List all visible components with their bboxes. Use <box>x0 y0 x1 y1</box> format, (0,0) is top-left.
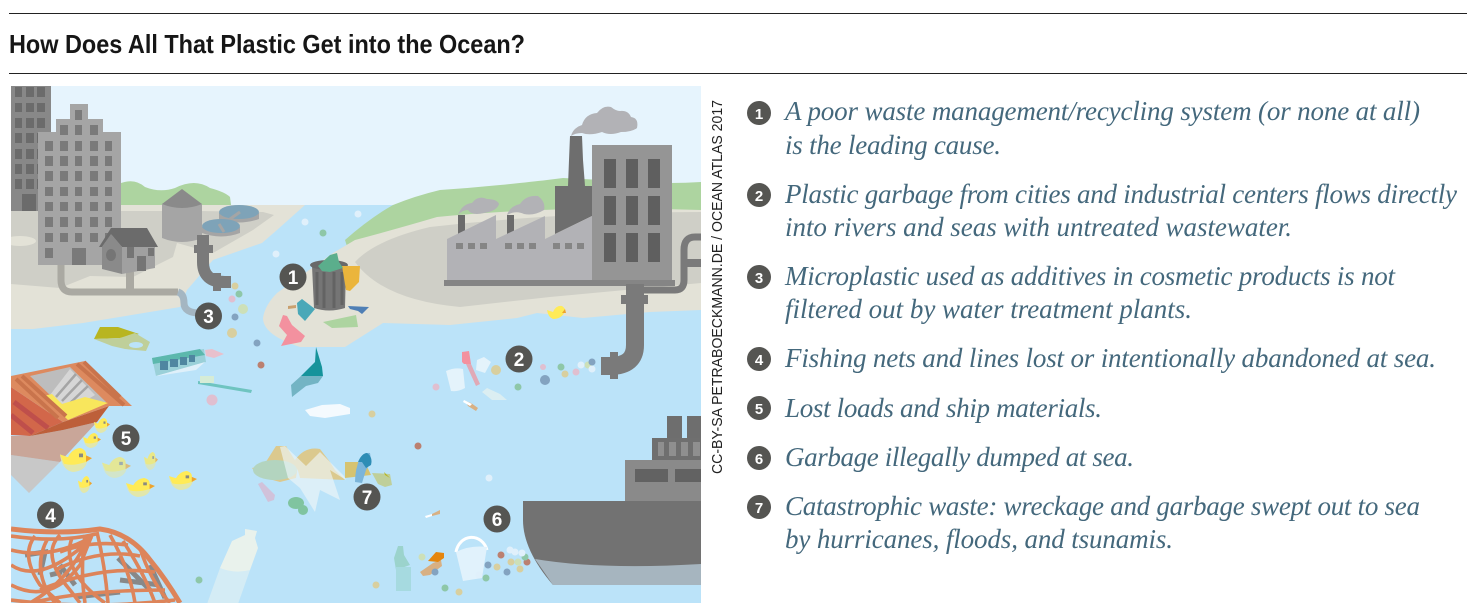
island litter <box>279 299 369 397</box>
marker 1 <box>280 264 306 290</box>
legend item 6: 6 <box>755 451 763 468</box>
legend item 2: into rivers and seas with untreated wastewater. <box>785 212 1292 242</box>
legend item 6: Garbage illegally dumped at sea. <box>785 442 1134 472</box>
legend item 4: Fishing nets and lines lost or intentionally abandoned at sea. <box>784 343 1436 373</box>
legend item 7: 7 <box>755 500 763 517</box>
marker 3: 3 <box>203 307 214 328</box>
left shore <box>11 205 305 329</box>
right hills <box>345 178 701 245</box>
marker 4 <box>37 502 64 528</box>
top rule <box>9 13 1467 14</box>
front tower <box>38 104 121 265</box>
litter near number 2 <box>446 351 507 411</box>
legend item 3 <box>747 261 1396 324</box>
marker 3 <box>195 302 222 330</box>
legend item 5: 5 <box>755 401 763 418</box>
floating bag <box>94 327 150 351</box>
legend item 2: 2 <box>755 188 763 205</box>
fishing net <box>11 529 180 605</box>
marker 2 <box>506 346 532 372</box>
illustration: plastic pathways into the ocean <box>4 86 701 605</box>
legend item 3: 3 <box>755 270 763 287</box>
legend item 2 <box>747 179 1457 242</box>
sky <box>11 86 701 206</box>
right ground shadow <box>355 212 701 307</box>
marker 5: 5 <box>121 429 132 450</box>
white bag <box>305 404 350 418</box>
marker 2: 2 <box>514 350 524 371</box>
silo <box>162 189 202 242</box>
house <box>99 228 158 274</box>
marker 4: 4 <box>45 506 56 527</box>
legend item 1: 1 <box>755 106 763 123</box>
source credit: CC-BY-SA PETRABOECKMANN.DE / OCEAN ATLAS 2017 <box>709 100 726 474</box>
legend item 7 <box>747 491 1420 554</box>
legend item 3: filtered out by water treatment plants. <box>785 294 1192 324</box>
clarifier tanks <box>202 205 259 236</box>
marker 1: 1 <box>288 268 299 289</box>
legend item 4: 4 <box>755 352 764 369</box>
factory chimneys and smoke <box>458 107 637 235</box>
outflow pipe right <box>601 237 701 379</box>
marker 7 <box>354 484 380 510</box>
debris cluster <box>252 446 371 515</box>
legend item 1 <box>747 96 1420 160</box>
left hills <box>121 181 231 205</box>
legend item 5: Lost loads and ship materials. <box>784 393 1102 423</box>
title rule <box>9 73 1467 74</box>
legend item 7: by hurricanes, floods, and tsunamis. <box>785 524 1173 554</box>
rubber ducks <box>60 418 197 497</box>
drain pipes <box>61 265 200 313</box>
litter near number 6 <box>394 510 487 591</box>
legend item 3: Microplastic used as additives in cosmetic products is not <box>784 261 1396 291</box>
legend item 1: is the leading cause. <box>785 130 1001 160</box>
legend list <box>747 96 1457 554</box>
marker 6 <box>484 506 510 532</box>
legend item 2: Plastic garbage from cities and industrial centers flows directly <box>784 179 1457 209</box>
marker 7: 7 <box>362 488 372 509</box>
cargo ship <box>523 416 701 585</box>
trash bin <box>310 253 360 310</box>
factory sheds <box>447 215 592 280</box>
left ground shadow <box>11 211 274 288</box>
factory main block <box>444 145 675 286</box>
legend item 7: Catastrophic waste: wreckage and garbage swept out to sea <box>785 491 1420 521</box>
title: How Does All That Plastic Get into the Ocean? <box>9 29 525 59</box>
large bottle <box>207 529 258 604</box>
floating particles <box>196 210 596 596</box>
outflow pipe left <box>194 235 231 291</box>
flip-flop and bottle cap <box>355 453 392 487</box>
legend item 1: A poor waste management/recycling system (or none at all) <box>783 96 1420 126</box>
toothpaste tray and toothbrush <box>152 349 252 393</box>
duck on shore <box>547 306 566 319</box>
crate <box>11 361 132 493</box>
back tower <box>11 86 51 211</box>
right shore and island <box>263 209 701 347</box>
marker 5 <box>112 424 140 452</box>
marker 6: 6 <box>492 510 502 531</box>
water <box>11 205 701 603</box>
